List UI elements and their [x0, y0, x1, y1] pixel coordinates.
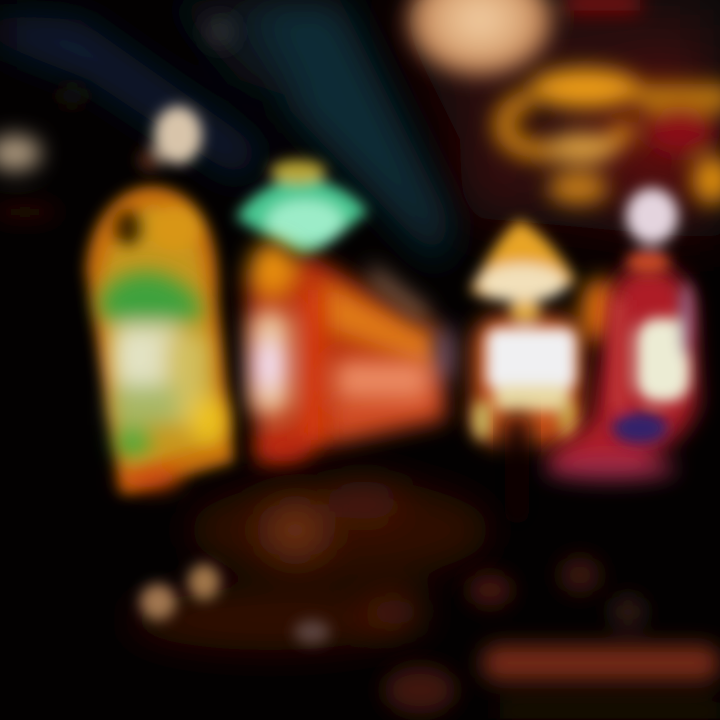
lamp: green shade	[236, 160, 368, 258]
floor: lower right reflections	[384, 557, 720, 720]
ceiling: dark red upper right	[390, 0, 720, 240]
ceiling lamp	[408, 0, 640, 76]
table: roulette area	[130, 480, 490, 650]
machine: left arch	[86, 186, 234, 494]
golden swirl sign	[504, 68, 720, 204]
machine: centre white with hat lamp	[470, 220, 620, 525]
lamp: white globe	[138, 106, 202, 172]
machines: middle orange row	[245, 242, 455, 465]
small ceiling lights	[0, 19, 234, 220]
ceiling: teal diagonal band	[0, 0, 450, 265]
machine: right red arch	[544, 188, 698, 480]
